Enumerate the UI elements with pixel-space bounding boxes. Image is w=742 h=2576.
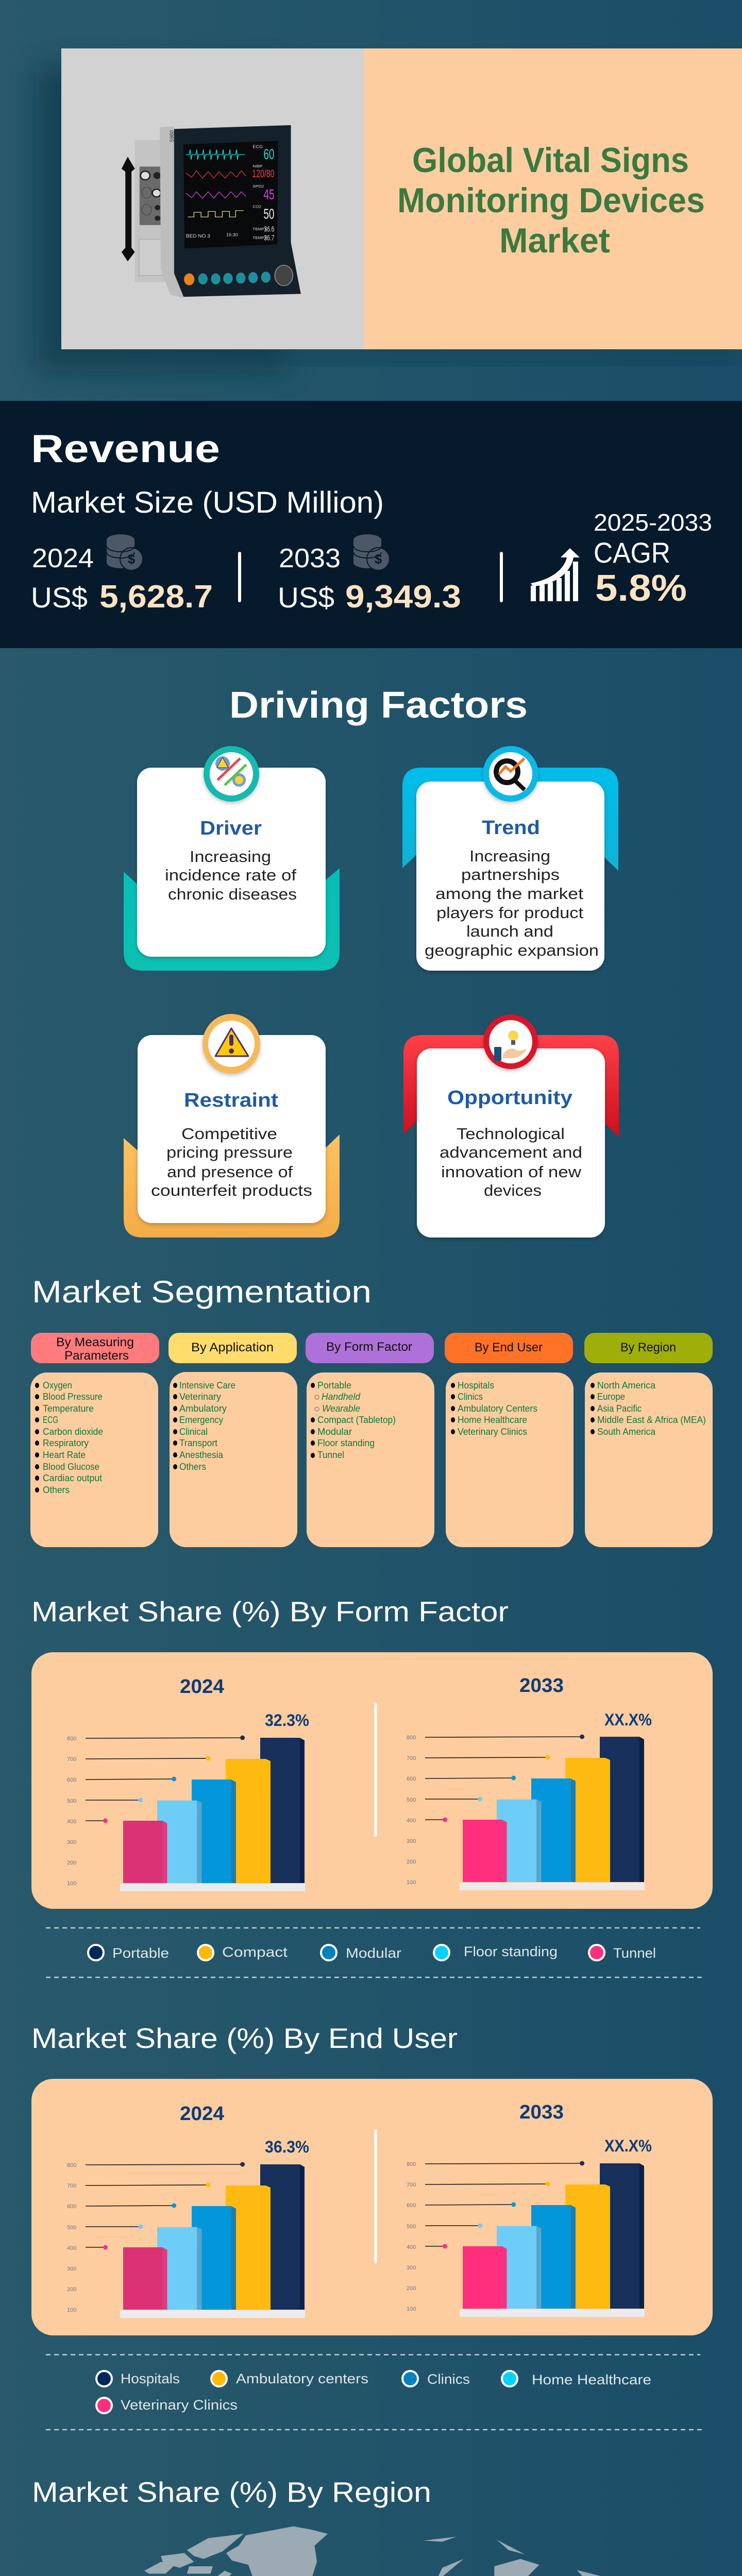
revenue 2033 (278, 534, 461, 615)
bar chart: end user 2024: 200 (67, 2286, 76, 2293)
panel: by application: Ambulatory (179, 1403, 227, 1414)
icon: patient monitor: 36.7 (264, 234, 274, 243)
CAGR: 5.8% (595, 568, 687, 609)
bar chart: form factor 2024: 300 (67, 1839, 76, 1845)
legend: end user: Veterinary Clinics (121, 2397, 238, 2413)
icon: patient monitor: 60 (263, 146, 274, 162)
title: Market (499, 221, 610, 260)
panel: by region: North America (597, 1380, 656, 1391)
panel: by end user: Home Healthcare (458, 1415, 527, 1425)
panel: by measuring parameters (30, 1333, 159, 1547)
panel: by form factor: Portable (317, 1380, 351, 1391)
panel: by measuring parameters: Heart Rate (43, 1450, 86, 1460)
card text: Competitive (181, 1125, 277, 1143)
legend: form factor: Compact (222, 1944, 288, 1960)
icon: patient monitor: ECG (252, 144, 263, 149)
revenue 2024: 5,628.7 (99, 579, 213, 615)
bar chart: end user 2024 (67, 2162, 305, 2318)
bar chart: end user 2033: 500 (407, 2224, 416, 2230)
value label 2033: XX.X% (604, 2137, 652, 2155)
card title: Trend (482, 817, 540, 839)
card text: Increasing (190, 848, 271, 866)
bar chart: form factor 2024: 500 (67, 1798, 76, 1804)
panel: by end user: By End User (475, 1341, 543, 1354)
bar chart: end user 2024: 100 (67, 2307, 76, 2313)
bar chart: end user 2033: 300 (407, 2265, 416, 2271)
revenue 2024: $ (128, 551, 136, 567)
panel: by application: Transport (179, 1438, 217, 1448)
card text: counterfeit products (151, 1181, 312, 1199)
panel: restraint (124, 1014, 340, 1238)
card title: Opportunity (447, 1087, 572, 1109)
panel: trend (402, 746, 618, 971)
panel: by measuring parameters: Temperature (43, 1403, 94, 1414)
revenue 2033: US$ (278, 581, 334, 614)
card text (425, 847, 599, 959)
year 2024: 2024 (180, 1676, 224, 1698)
card text: and presence of (167, 1163, 293, 1181)
card text (151, 1125, 312, 1199)
card text (440, 1125, 582, 1199)
card text: Increasing (469, 847, 550, 865)
card text: chronic diseases (168, 885, 297, 903)
revenue 2033: 2033 (279, 544, 341, 573)
panel: by end user: Ambulatory Centers (458, 1403, 537, 1414)
value label 2024: 32.3% (265, 1711, 309, 1730)
title (397, 141, 705, 260)
bar chart: end user 2033: 700 (407, 2182, 416, 2188)
panel: by measuring parameters: Parameters (64, 1349, 129, 1363)
panel: by form factor: Wearable (322, 1403, 360, 1414)
card text: Technological (457, 1125, 565, 1143)
panel: by form factor (306, 1333, 434, 1547)
hero banner (36, 48, 742, 371)
icon: patient monitor: 36.6 (264, 225, 275, 233)
panel: by region: By Region (620, 1341, 676, 1354)
icon: patient monitor: NIBP (252, 164, 262, 168)
panel: by measuring parameters: Others (43, 1485, 70, 1495)
bar chart: end user 2024: 300 (67, 2266, 76, 2272)
heading: revenue: Revenue (31, 427, 220, 471)
panel: by measuring parameters: By Measuring (56, 1335, 134, 1349)
icon: patient monitor: TEMP2 (252, 236, 267, 240)
card text: partnerships (461, 866, 560, 884)
legend: form factor (46, 1928, 705, 1977)
bar chart: form factor 2024: 800 (67, 1736, 76, 1742)
bar chart: form factor 2024: 200 (67, 1860, 76, 1866)
panel: by region (584, 1333, 713, 1547)
legend: end user (46, 2354, 705, 2430)
card text: innovation of new (441, 1163, 582, 1181)
icon: patient monitor: 45 (263, 187, 274, 202)
heading: share by form factor: Market Share (%) By Form Factor (31, 1596, 509, 1628)
bar chart: end user 2033: 100 (407, 2306, 416, 2312)
heading: market segmentation: Market Segmentation (32, 1275, 372, 1309)
map: eurasia (333, 2559, 667, 2576)
icon: opportunity (483, 1014, 538, 1069)
value label 2033: XX.X% (604, 1710, 652, 1729)
card text: launch and (466, 922, 553, 940)
card text: devices (484, 1181, 542, 1199)
card text: players for product (436, 904, 583, 922)
bar chart: form factor 2024 (67, 1735, 305, 1891)
bar chart: form factor 2033 (407, 1734, 645, 1890)
revenue 2033: $ (375, 551, 382, 567)
heading: share by region: Market Share (%) By Region (32, 2476, 431, 2508)
icon: patient monitor: SPO2 (252, 184, 264, 189)
panel: by form factor: By Form Factor (326, 1340, 412, 1354)
bar chart: end user 2033: 600 (407, 2202, 416, 2209)
card text: advancement and (440, 1143, 582, 1161)
title: Global Vital Signs (412, 141, 689, 180)
year 2033: 2033 (519, 1675, 564, 1697)
panel: by application: Veterinary (179, 1392, 221, 1402)
bar chart: end user 2024: 600 (67, 2204, 76, 2210)
bar chart: end user 2033: 200 (407, 2285, 416, 2292)
icon: patient monitor: 120/80 (252, 167, 274, 180)
bar chart: form factor 2033: 400 (407, 1818, 416, 1824)
bar chart: form factor 2033: 100 (407, 1879, 416, 1886)
icon: patient monitor: CO2 (252, 205, 261, 209)
bar chart: end user 2024: 400 (67, 2245, 76, 2251)
card title: Driver (200, 818, 262, 839)
panel: by application (168, 1333, 297, 1547)
panel: by measuring parameters: Oxygen (43, 1380, 72, 1391)
card text: incidence rate of (165, 866, 296, 884)
panel: by application: Anesthesia (179, 1450, 224, 1460)
bar chart: form factor 2033: 800 (407, 1735, 416, 1741)
legend: end user: Home Healthcare (532, 2372, 651, 2387)
panel: by form factor: Floor standing (317, 1438, 375, 1448)
bar chart: form factor 2024: 400 (67, 1819, 76, 1825)
panel: by application: Emergency (179, 1415, 223, 1425)
panel: by end user (445, 1333, 574, 1547)
icon: restraint (203, 1014, 260, 1074)
card text: pricing pressure (166, 1143, 293, 1161)
world map (71, 2527, 667, 2576)
panel: by measuring parameters: Respiratory (43, 1438, 89, 1448)
panel: opportunity (403, 1014, 619, 1238)
panel: by application: Intensive Care (179, 1380, 235, 1391)
bar chart: end user 2024: 800 (67, 2162, 76, 2168)
bar chart: form factor 2033: 200 (407, 1859, 416, 1865)
panel: revenue (0, 401, 742, 648)
icon: growth chart (531, 548, 580, 601)
legend: form factor: Tunnel (613, 1945, 656, 1961)
panel: by end user: Clinics (458, 1392, 483, 1402)
revenue 2024: US$ (31, 581, 88, 614)
bar chart: form factor 2024: 600 (67, 1777, 76, 1783)
panel: by application: Others (179, 1462, 206, 1472)
panel: by measuring parameters: Carbon dioxide (43, 1427, 103, 1437)
panel: by form factor: Handheld (322, 1392, 361, 1402)
panel: by measuring parameters: Blood Pressure (43, 1392, 103, 1402)
icon: patient monitor: 50 (263, 206, 274, 222)
panel: by application: By Application (191, 1341, 274, 1354)
bar chart: end user 2024: 700 (67, 2183, 76, 2189)
panel: by region: South America (597, 1427, 656, 1437)
panel: by region: Asia Pacific (597, 1403, 642, 1414)
revenue 2024 (31, 534, 213, 615)
CAGR: CAGR (594, 536, 670, 569)
CAGR (594, 509, 712, 609)
market size label: Market Size (USD Million) (31, 486, 384, 519)
icon: patient monitor: 16:30 (226, 232, 238, 237)
legend: form factor: Modular (346, 1945, 401, 1961)
bar chart: end user 2033: 400 (407, 2244, 416, 2250)
bar chart: form factor 2033: 500 (407, 1797, 416, 1803)
bar chart: form factor 2024: 100 (67, 1880, 76, 1887)
icon: driver (204, 746, 259, 802)
heading: share by end user: Market Share (%) By End User (31, 2022, 458, 2054)
year 2033: 2033 (519, 2102, 564, 2123)
icon: trend (483, 746, 538, 802)
panel: by end user: Veterinary Clinics (458, 1427, 527, 1437)
card text: geographic expansion (425, 941, 599, 959)
map: arctic islands (144, 2534, 244, 2576)
panel: form factor charts (31, 1652, 713, 1909)
card text (165, 848, 297, 903)
bar chart: end user 2033: 800 (407, 2161, 416, 2167)
title: Monitoring Devices (397, 181, 705, 220)
legend: end user: Ambulatory centers (236, 2371, 368, 2386)
bar chart: end user 2024: 500 (67, 2225, 76, 2231)
panel: by region: Europe (597, 1392, 625, 1402)
map: greenland (226, 2527, 328, 2576)
panel: by measuring parameters: Blood Glucose (43, 1462, 99, 1472)
map: oceania and asia islands (305, 2537, 646, 2576)
panel: by measuring parameters: ECG (43, 1415, 58, 1425)
card title: Restraint (184, 1090, 278, 1111)
legend: end user: Clinics (427, 2371, 470, 2387)
legend: form factor: Floor standing (464, 1944, 558, 1959)
bar chart: form factor 2033: 600 (407, 1776, 416, 1782)
value label 2024: 36.3% (265, 2138, 309, 2156)
icon: patient monitor: TEMP1 (252, 227, 267, 231)
panel: by form factor: Compact (Tabletop) (317, 1415, 396, 1425)
year 2024: 2024 (180, 2103, 224, 2125)
revenue 2024: 2024 (32, 544, 94, 573)
bar chart: end user 2033 (407, 2161, 645, 2317)
panel: by end user: Hospitals (458, 1380, 494, 1391)
icon: patient monitor: BED NO 3 (186, 233, 210, 239)
panel: end user charts (31, 2079, 713, 2335)
icon: patient monitor (122, 125, 301, 298)
CAGR: 2025-2033 (594, 509, 712, 536)
icon: patient monitor: S980 (170, 130, 175, 142)
panel: by form factor: Tunnel (317, 1450, 344, 1460)
card text: among the market (435, 885, 583, 903)
panel: driver (124, 746, 340, 971)
panel: by region: Middle East & Africa (MEA) (597, 1415, 706, 1425)
legend: form factor: Portable (112, 1945, 169, 1961)
panel: by form factor: Modular (317, 1427, 352, 1437)
heading: driving factors: Driving Factors (229, 685, 528, 726)
bar chart: form factor 2033: 300 (407, 1838, 416, 1844)
legend: end user: Hospitals (121, 2371, 180, 2386)
revenue 2033: 9,349.3 (345, 579, 461, 615)
panel: by measuring parameters: Cardiac output (43, 1473, 102, 1483)
bar chart: form factor 2024: 700 (67, 1756, 76, 1762)
panel: by application: Clinical (179, 1427, 208, 1437)
bar chart: form factor 2033: 700 (407, 1755, 416, 1761)
